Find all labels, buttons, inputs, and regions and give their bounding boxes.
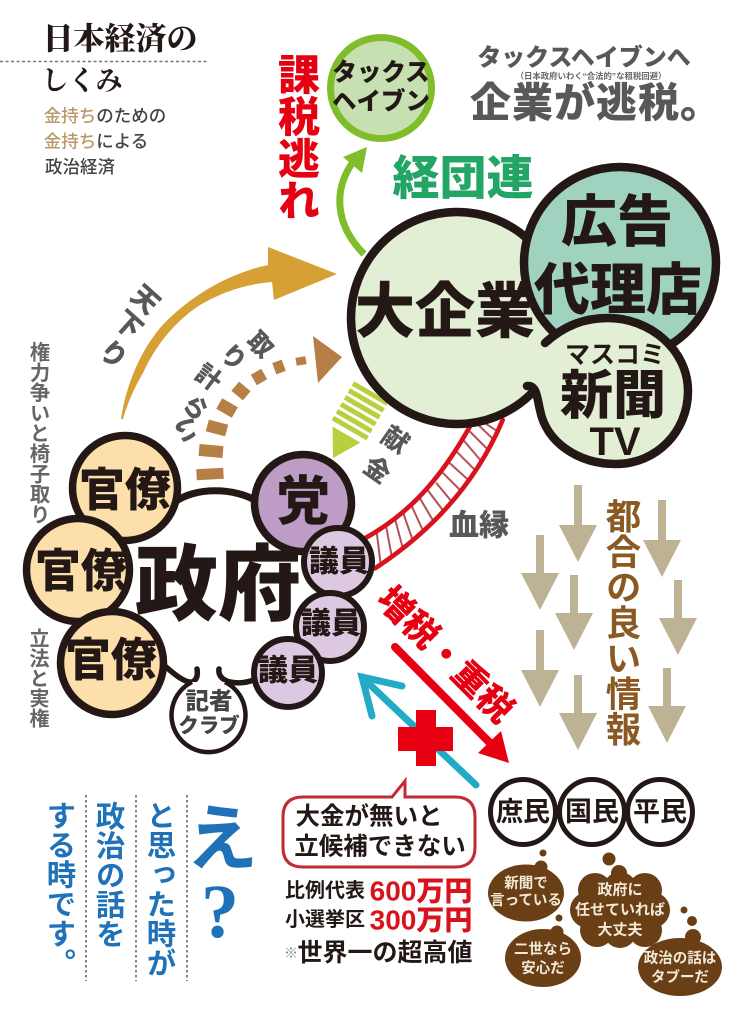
label: favours: 取 xyxy=(241,326,279,364)
text: government: 政府 xyxy=(135,538,301,632)
label: tax increase: 増税・重税 xyxy=(369,579,521,731)
circle: press club xyxy=(172,682,246,752)
circle: press club: クラブ xyxy=(178,714,240,738)
arrow: blue return xyxy=(362,677,476,785)
label: favours: ら xyxy=(177,390,213,426)
title line 1: 日本経済の xyxy=(42,22,198,56)
title line 2: しくみ xyxy=(42,66,122,96)
text: ad agency: 広告 xyxy=(561,190,673,254)
message column 3: する時です。 xyxy=(42,800,76,978)
label: amakudari: り xyxy=(93,335,133,375)
deposit amounts: 比例代表 xyxy=(285,879,365,902)
circle: tax haven: タックス xyxy=(332,58,430,86)
headline: companies flee tax xyxy=(470,44,722,126)
circle: common people: 庶民 xyxy=(496,797,550,827)
circle: ordinary people xyxy=(628,780,692,844)
thought bubble: politics taboo: タブーだ xyxy=(651,968,709,986)
side label: power struggle: 権力争いと椅子取り xyxy=(26,342,50,524)
label: favours: り xyxy=(214,339,252,377)
thought bubble: newspaper says: 新聞で xyxy=(504,875,548,892)
circle: tax haven xyxy=(330,38,432,138)
text: mass media: TV xyxy=(589,420,641,464)
label: donation: 金 xyxy=(358,450,396,490)
question mark: ? xyxy=(201,870,239,954)
circle: bureaucrat 1: 官僚 xyxy=(79,464,171,516)
deposit amounts: 小選挙区 xyxy=(285,908,365,931)
subtitle text: 金持ちのための xyxy=(44,106,166,126)
deposit amounts: ※ xyxy=(284,945,298,961)
blob: mass media xyxy=(527,318,688,464)
headline: companies flee tax: （日本政府いわく“合法的”な租税回避） xyxy=(516,71,666,81)
label: amakudari: 下 xyxy=(108,305,148,345)
text: mass media: マスコミ xyxy=(565,341,665,369)
thought bubble: leave to government: 任せていれば xyxy=(575,902,665,918)
arrow: companies to tax haven xyxy=(340,147,367,254)
circle: legislator 3 xyxy=(254,639,322,707)
exclamation: え xyxy=(186,800,258,880)
thought bubble: leave to government: 政府に xyxy=(597,882,643,898)
rope: blood ties xyxy=(365,420,503,568)
thought bubble: second generation: 二世なら xyxy=(514,941,572,958)
circle: legislator 2: 議員 xyxy=(301,608,361,640)
circle: bureaucrat 2 xyxy=(26,518,130,622)
label: favours: 計 xyxy=(190,359,226,397)
headline: companies flee tax: 企業が逃税。 xyxy=(470,80,722,126)
circle: bureaucrat 1 xyxy=(72,436,178,540)
blue message xyxy=(42,795,258,981)
circle: bureaucrat 3: 官僚 xyxy=(65,634,157,686)
icon: red cross xyxy=(398,710,453,766)
subtitle text: 金持ちによる xyxy=(44,132,148,152)
label: amakudari: 天 xyxy=(125,280,165,320)
arrow: dashed favours xyxy=(196,336,342,480)
circle: party xyxy=(254,454,352,552)
thought bubble: politics taboo xyxy=(638,906,722,996)
deposit amounts: 600万円 xyxy=(370,876,472,906)
circle: tax haven: ヘイブン xyxy=(332,86,430,116)
label: blood ties: 血縁 xyxy=(449,510,509,542)
circle: ad agency xyxy=(524,167,716,359)
circle: bureaucrat 3 xyxy=(60,612,164,714)
circle: big business xyxy=(351,212,563,424)
label: favours xyxy=(169,326,279,445)
arrow: amakudari gold xyxy=(121,247,337,419)
subtitle text xyxy=(44,106,166,177)
side label: legislation: 立法と実権 xyxy=(26,628,49,728)
circle: press club: 記者 xyxy=(186,688,232,714)
message column 2: 政治の話を xyxy=(92,801,125,949)
arrows: convenient information xyxy=(521,485,697,750)
circle: bureaucrat 2: 官僚 xyxy=(35,545,127,597)
circle: party: 党 xyxy=(276,472,330,532)
circle: legislator 1: 議員 xyxy=(309,546,369,578)
connectors: government ring xyxy=(165,491,258,683)
thought bubble: politics taboo: 政治の話は xyxy=(644,949,717,967)
message column 1: と思った時が xyxy=(142,800,176,978)
deposit amounts: 世界一の超高値 xyxy=(297,939,473,967)
heading: tax evasion: 課税逃れ xyxy=(272,53,320,221)
thought bubble: newspaper says xyxy=(488,850,564,922)
label: donation xyxy=(358,420,414,490)
circle: legislator 3: 議員 xyxy=(258,654,318,688)
arrow: donation striped xyxy=(316,381,389,468)
thought bubble: newspaper says: 言っている xyxy=(490,893,562,909)
callout: cannot run without money xyxy=(283,781,475,867)
subtitle text: 政治経済 xyxy=(45,157,115,177)
callout: cannot run without money: 大金が無いと xyxy=(296,802,442,830)
text: ad agency: 代理店 xyxy=(534,258,702,322)
label: amakudari xyxy=(93,280,165,375)
deposit amounts: 300万円 xyxy=(370,904,472,936)
callout: cannot run without money: 立候補できない xyxy=(294,832,466,860)
text: big business: 大企業 xyxy=(355,278,535,346)
thought bubble: leave to government xyxy=(570,852,670,948)
label: favours: い xyxy=(169,415,201,445)
text: mass media: 新聞 xyxy=(560,366,666,426)
circle: ordinary people: 平民 xyxy=(633,797,687,827)
circle: citizens xyxy=(560,780,624,844)
arrow: red tax xyxy=(395,647,509,763)
deposit amounts xyxy=(284,876,473,967)
thought bubble: second generation: 安心だ xyxy=(521,959,565,977)
label: convenient information: 都合の良い情報 xyxy=(601,498,641,746)
title block xyxy=(0,22,207,177)
text: ad agency xyxy=(534,190,702,322)
label: keidanren: 経団連 xyxy=(392,152,534,204)
thought bubble: second generation xyxy=(505,914,581,987)
text: mass media xyxy=(560,341,666,464)
thought bubble: leave to government: 大丈夫 xyxy=(597,920,643,938)
circle: legislator 1 xyxy=(304,528,372,596)
label: donation: 献 xyxy=(376,420,414,460)
circle: citizens: 国民 xyxy=(565,797,619,827)
circle: common people xyxy=(490,780,556,844)
circle: legislator 2 xyxy=(296,593,364,661)
headline: companies flee tax: タックスヘイブンへ xyxy=(477,44,691,72)
